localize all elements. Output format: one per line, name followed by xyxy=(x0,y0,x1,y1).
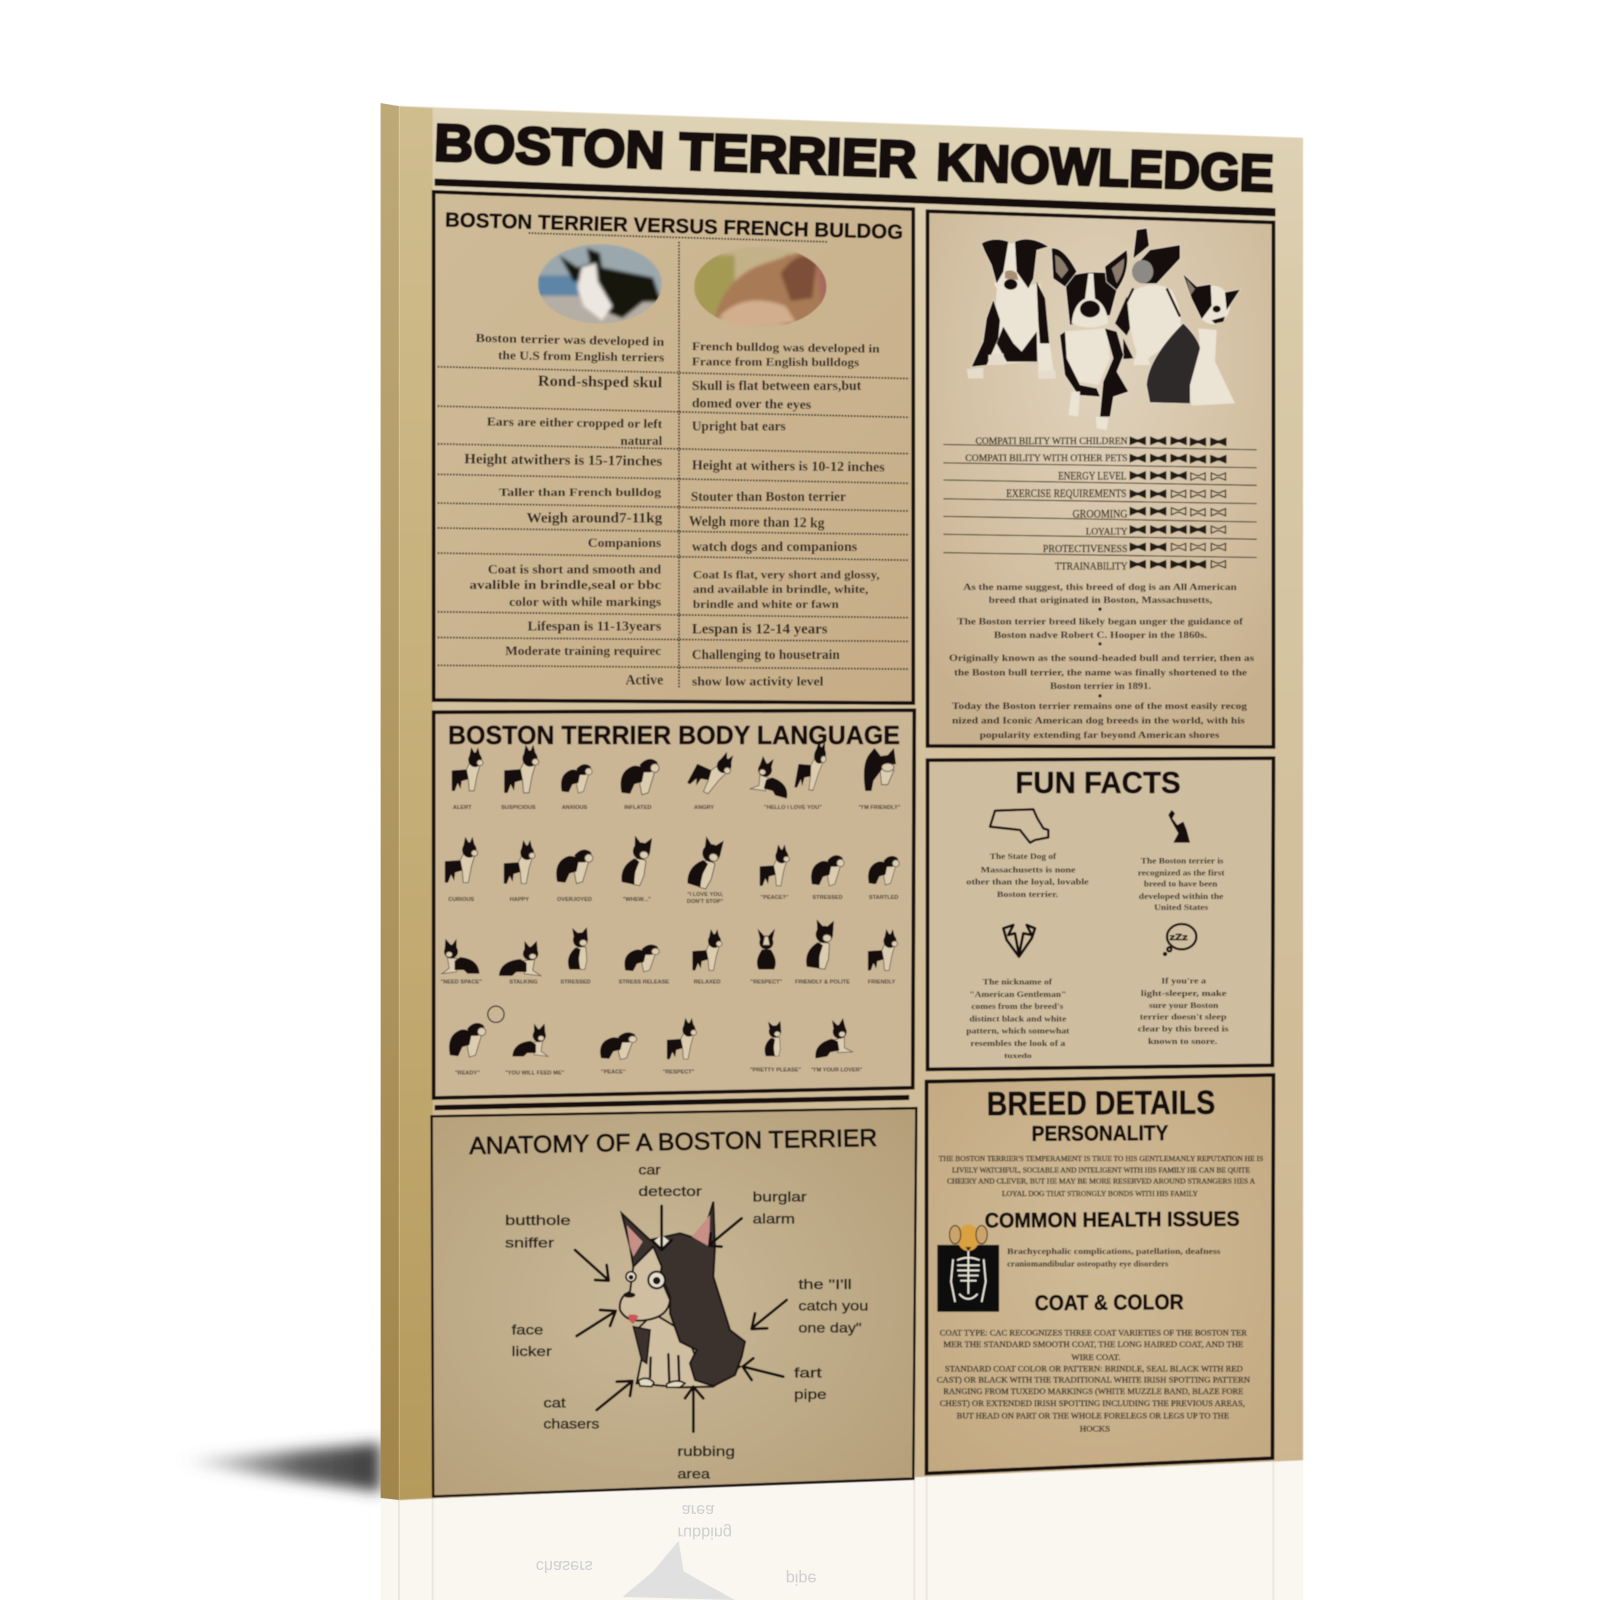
heading: versus: BOSTON TERRIER VERSUS FRENCH BULDOG xyxy=(445,210,903,244)
fact: snoring: known to snore. xyxy=(1148,1036,1217,1046)
history text: Boston terrier in 1891. xyxy=(1050,681,1151,692)
fact: state dog: other than the loyal, lovable xyxy=(966,877,1089,887)
fact: snoring: clear by this breed is xyxy=(1138,1024,1229,1034)
title: KNOWLEDGE xyxy=(935,134,1275,203)
dog poses row 1: "I'M FRIENDLY" xyxy=(859,805,901,811)
rating: trainability: TTRAINABILITY xyxy=(1055,560,1128,572)
rating: children: COMPATI BILITY WITH CHILDREN xyxy=(976,436,1128,447)
icon: massachusetts outline xyxy=(990,809,1048,843)
icon: snore thought bubble xyxy=(1164,924,1196,955)
dog poses row 3: FRIENDLY & POLITE xyxy=(795,980,850,986)
icon: tuxedo xyxy=(1003,925,1035,957)
heading: common health issues: COMMON HEALTH ISSUES xyxy=(985,1208,1240,1233)
dog poses row 1: INFLATED xyxy=(624,805,651,811)
dog poses row 1: ANXIOUS xyxy=(562,805,588,811)
heading: breed details: BREED DETAILS xyxy=(987,1085,1215,1123)
boston terrier column: Taller than French bulldog xyxy=(499,486,661,499)
boston terrier column: Coat is short and smooth and xyxy=(488,562,661,576)
dog poses row 3: STALKING xyxy=(509,980,538,986)
french bulldog column: show low activity level xyxy=(692,675,824,689)
dog poses row 3: STRESS RELEASE xyxy=(619,980,669,986)
french bulldog column: watch dogs and companions xyxy=(692,539,858,554)
dog poses row 2: DON'T STOP" xyxy=(687,899,724,905)
heading: personality: PERSONALITY xyxy=(1032,1121,1168,1146)
coat text: HOCKS xyxy=(1080,1425,1111,1434)
reflection: area xyxy=(682,1501,715,1519)
dog poses row 3: FRIENDLY xyxy=(868,980,896,986)
boston terrier column: Companions xyxy=(588,536,661,550)
title: BOSTON TERRIER xyxy=(433,114,918,189)
illustration: cartoon boston terrier xyxy=(620,1202,745,1387)
dog poses row 2 xyxy=(445,833,899,905)
coat text: MER THE STANDARD SMOOTH COAT, THE LONG HAIRED COAT, AND THE xyxy=(943,1340,1243,1349)
fact: snoring xyxy=(1138,976,1229,1046)
rating: trainability xyxy=(1055,560,1226,572)
history text: breed that originated in Boston, Massachusetts, xyxy=(989,595,1213,606)
boston terrier column xyxy=(464,331,665,689)
coat text: BUT HEAD ON PART OR THE WHOLE FORELEGS OR LEGS UP TO THE xyxy=(957,1411,1229,1420)
fact: state dog: Boston terrier. xyxy=(997,889,1058,899)
heading: coat and color: COAT & COLOR xyxy=(1035,1290,1184,1315)
dog poses row 3: RELAXED xyxy=(694,980,721,986)
anatomy labels: pipe xyxy=(794,1386,827,1402)
personality text: CHEERY AND CLEVER, BUT HE MAY BE MORE RESERVED AROUND STRANGERS HES A xyxy=(947,1177,1255,1186)
icon: statue of liberty xyxy=(1168,810,1190,843)
health text xyxy=(1007,1246,1221,1268)
coat text: CAST) OR BLACK WITH THE TRADITIONAL WHITE IRISH SPOTTING PATTERN xyxy=(937,1376,1250,1385)
anatomy labels: butthole xyxy=(505,1212,571,1228)
dog poses row 1: ALERT xyxy=(453,805,472,811)
background shadow xyxy=(182,1443,381,1492)
rating: children xyxy=(976,436,1227,447)
health text: Brachycephalic complications, patellation, deafness xyxy=(1007,1246,1221,1256)
dog poses row 2: "PEACE?" xyxy=(760,895,789,901)
fact: american gentleman: "American Gentleman" xyxy=(969,989,1066,999)
french bulldog column: Coat Is flat, very short and glossy, xyxy=(693,569,880,582)
french bulldog column: France from English bulldogs xyxy=(692,355,860,369)
ratings list xyxy=(943,436,1257,572)
french bulldog column: French bulldog was developed in xyxy=(692,340,880,356)
french bulldog column: domed over the eyes xyxy=(692,395,811,412)
dog poses row 4: "RESPECT" xyxy=(663,1069,695,1075)
fact: first us breed: The Boston terrier is xyxy=(1141,855,1224,865)
coat text: COAT TYPE: CAC RECOGNIZES THREE COAT VARIETIES OF THE BOSTON TER xyxy=(940,1329,1248,1338)
canvas left margin xyxy=(399,106,433,1500)
french bulldog column xyxy=(689,340,885,689)
personality text: THE BOSTON TERRIER'S TEMPERAMENT IS TRUE TO HIS GENTLEMANLY REPUTATION HE IS xyxy=(939,1154,1263,1163)
photo: boston terrier oval xyxy=(538,244,662,327)
boston terrier column: avalible in brindle,seal or bbc xyxy=(469,578,662,592)
boston terrier column: Weigh around7-11kg xyxy=(527,510,662,526)
dog poses row 1: SUSPICIOUS xyxy=(501,805,536,811)
fact: american gentleman: The nickname of xyxy=(983,977,1052,987)
title rule xyxy=(435,179,1276,216)
french bulldog column: Height at withers is 10-12 inches xyxy=(692,457,885,474)
panel: versus french bulldog xyxy=(434,192,913,703)
history text: Originally known as the sound-headed bull and terrier, then as xyxy=(949,653,1254,664)
dog poses row 3 xyxy=(441,918,898,986)
fact: snoring: terrier doesn't sleep xyxy=(1140,1011,1227,1021)
rating: loyalty xyxy=(1086,525,1226,538)
coat text xyxy=(937,1329,1250,1434)
rating: grooming xyxy=(1072,507,1226,520)
boston terrier column: color with while markings xyxy=(509,595,661,609)
dog poses row 2: STARTLED xyxy=(869,895,898,901)
dog: left sitting xyxy=(967,239,1056,379)
french bulldog column: Lespan is 12-14 years xyxy=(692,622,828,638)
french bulldog column: brindle and white or fawn xyxy=(693,598,839,611)
history text: the Boston bull terrier, the name was finally shortened to the xyxy=(954,668,1248,679)
fact: american gentleman: resembles the look of a xyxy=(970,1038,1066,1048)
personality text xyxy=(939,1154,1263,1198)
dog poses row 2: CURIOUS xyxy=(448,897,474,903)
fact: first us breed: breed to have been xyxy=(1144,879,1218,889)
anatomy labels: chasers xyxy=(543,1415,599,1431)
panel: anatomy xyxy=(432,1108,916,1496)
history text xyxy=(949,582,1254,741)
rating: other pets: COMPATI BILITY WITH OTHER PETS xyxy=(965,453,1128,464)
panel: fun facts xyxy=(928,758,1273,1069)
panel: breed details xyxy=(927,1075,1273,1473)
canvas spine xyxy=(381,103,399,1500)
fact: state dog: The State Dog of xyxy=(990,851,1056,861)
fact: american gentleman: distinct black and white xyxy=(969,1013,1066,1023)
arrows: anatomy pointers xyxy=(575,1206,787,1432)
reflection xyxy=(381,1460,1303,1600)
fact: american gentleman xyxy=(966,977,1070,1060)
rating: energy xyxy=(1058,471,1226,483)
fact: snoring: light-sleeper, make xyxy=(1141,988,1227,998)
fact: state dog: Massachusetts is none xyxy=(981,864,1076,874)
boston terrier column: Ears are either cropped or left xyxy=(487,415,663,431)
rule under panel xyxy=(435,1095,909,1110)
rating: loyalty: LOYALTY xyxy=(1086,527,1128,538)
french bulldog column: Upright bat ears xyxy=(692,419,786,434)
dog poses row 2: "I LOVE YOU, xyxy=(687,892,724,898)
dog poses row 3: "NEED SPACE" xyxy=(441,980,482,986)
dog poses row 1: "HELLO I LOVE YOU" xyxy=(764,805,822,811)
fact: snoring: sure your Boston xyxy=(1149,1000,1219,1010)
boston terrier column: Boston terrier was developed in xyxy=(475,331,665,349)
dog poses row 4: "PEACE" xyxy=(601,1069,626,1075)
dog: right sitting xyxy=(1147,274,1240,406)
dog poses row 4: "I'M YOUR LOVER" xyxy=(811,1067,863,1073)
reflection: rubbing xyxy=(678,1524,732,1542)
rating: exercise xyxy=(1006,488,1226,500)
rating: protectiveness: PROTECTIVENESS xyxy=(1043,544,1128,555)
personality text: LOYAL DOG THAT STRONGLY BONDS WITH HIS FAMILY xyxy=(1002,1189,1198,1198)
photo: french bulldog oval xyxy=(694,246,829,328)
dog poses row 4: "READY" xyxy=(455,1070,480,1076)
fact: american gentleman: tuxedo xyxy=(1004,1051,1032,1060)
heading: body language: BOSTON TERRIER BODY LANGUAGE xyxy=(448,720,900,750)
dog poses row 1: ANGRY xyxy=(694,805,714,811)
anatomy labels: rubbing xyxy=(677,1443,735,1459)
anatomy labels: car xyxy=(638,1162,661,1178)
dog poses row 2: HAPPY xyxy=(510,897,529,903)
boston terrier column: Lifespan is 11-13years xyxy=(528,619,662,634)
dog: back right-facing xyxy=(1115,228,1181,365)
boston terrier column: the U.S from English terriers xyxy=(498,348,665,365)
dog poses row 2: OVERJOYED xyxy=(557,897,592,903)
title xyxy=(433,114,1275,203)
boston terrier column: natural xyxy=(620,434,663,448)
dog poses row 2: STRESSED xyxy=(812,895,843,901)
photo: four boston terriers xyxy=(967,228,1240,430)
personality text: LIVELY WATCHFUL, SOCIABLE AND INTELIGENT WITH HIS FAMILY HE CAN BE QUITE xyxy=(952,1165,1250,1174)
history text: Boston nadve Robert C. Hooper in the 1860s. xyxy=(994,630,1207,641)
rating: exercise: EXERCISE REQUIREMENTS xyxy=(1006,488,1127,500)
boston terrier column: Rond-shsped skul xyxy=(538,373,662,391)
history text: nized and Iconic American dog breeds in the world, with his xyxy=(952,715,1245,726)
anatomy labels: burglar xyxy=(753,1189,807,1205)
boston terrier column: Moderate training requirec xyxy=(505,644,662,658)
french bulldog column: Skull is flat between ears,but xyxy=(692,378,862,393)
anatomy labels: one day" xyxy=(798,1319,862,1335)
fact: first us breed xyxy=(1138,855,1225,912)
panel: body language xyxy=(434,710,914,1110)
dog poses row 3: STRESSED xyxy=(560,980,591,986)
dog poses row 4: "YOU WILL FEED ME" xyxy=(505,1070,565,1076)
history text: Today the Boston terrier remains one of the most easily recog xyxy=(952,701,1247,712)
anatomy labels: face xyxy=(512,1321,544,1337)
french bulldog column: and available in brindle, white, xyxy=(693,583,868,596)
fact: first us breed: recognized as the first xyxy=(1138,868,1225,878)
coat text: STANDARD COAT COLOR OR PATTERN: BRINDLE, SEAL BLACK WITH RED xyxy=(945,1364,1243,1373)
fact: snoring: If you're a xyxy=(1161,976,1207,986)
history text: popularity extending far beyond American shores xyxy=(980,730,1220,741)
health text: craniomandibular osteopathy eye disorders xyxy=(1007,1258,1169,1268)
anatomy labels: alarm xyxy=(753,1211,795,1227)
anatomy labels: catch you xyxy=(798,1298,868,1314)
anatomy labels: the "I'll xyxy=(798,1276,852,1292)
anatomy labels: detector xyxy=(638,1183,702,1199)
anatomy labels: area xyxy=(677,1465,710,1481)
boston terrier column: Height atwithers is 15-17inches xyxy=(464,451,663,470)
fact: first us breed: developed within the xyxy=(1139,891,1224,901)
canvas front xyxy=(399,106,1303,1500)
fact: american gentleman: comes from the breed's xyxy=(971,1001,1064,1011)
reflection: pipe xyxy=(786,1569,817,1587)
rating: energy: ENERGY LEVEL xyxy=(1058,471,1127,483)
french bulldog column: Stouter than Boston terrier xyxy=(691,489,846,504)
fact: american gentleman: pattern, which somewhat xyxy=(966,1026,1070,1036)
anatomy labels xyxy=(505,1162,868,1481)
heading: anatomy: ANATOMY OF A BOSTON TERRIER xyxy=(469,1125,878,1160)
coat text: RANGING FROM TUXEDO MARKINGS (WHITE MUZZLE BAND, BLAZE FORE xyxy=(943,1387,1243,1396)
dog poses row 1 xyxy=(452,737,901,811)
anatomy labels: sniffer xyxy=(505,1235,554,1251)
coat text: CHEST) OR EXTENDED IRISH SPOTTING INCLUDING THE PREVIOUS AREAS, xyxy=(940,1399,1245,1408)
panel: breed overview xyxy=(928,211,1273,747)
coat text: WIRE COAT. xyxy=(1071,1353,1120,1362)
rating: other pets xyxy=(965,453,1227,464)
anatomy labels: fart xyxy=(794,1364,822,1380)
fact: first us breed: United States xyxy=(1154,902,1209,912)
table dividers xyxy=(438,233,909,689)
french bulldog column: Challenging to housetrain xyxy=(692,647,840,662)
dog poses row 4 xyxy=(449,1006,863,1076)
dog poses row 3: "RESPECT" xyxy=(750,980,783,986)
anatomy labels: cat xyxy=(543,1394,566,1410)
rating: protectiveness xyxy=(1043,542,1226,555)
history text: As the name suggest, this breed of dog is an All American xyxy=(963,582,1237,593)
zzz inside bubble: zZz xyxy=(1169,932,1189,942)
history text: The Boston terrier breed likely began unger the guidance of xyxy=(957,616,1244,627)
dog poses row 2: "WHEW..." xyxy=(623,897,651,903)
rating: grooming: GROOMING xyxy=(1072,507,1128,520)
dog: center front xyxy=(1052,248,1128,430)
reflection: chasers xyxy=(536,1557,593,1575)
dog poses row 4: "PRETTY PLEASE" xyxy=(750,1067,802,1073)
icon: dog x-ray xyxy=(937,1224,999,1312)
heading: fun facts: FUN FACTS xyxy=(1015,766,1181,800)
anatomy labels: licker xyxy=(512,1343,552,1359)
french bulldog column: Welgh more than 12 kg xyxy=(689,514,825,531)
fact: state dog xyxy=(966,851,1089,899)
boston terrier column: Active xyxy=(626,673,663,689)
